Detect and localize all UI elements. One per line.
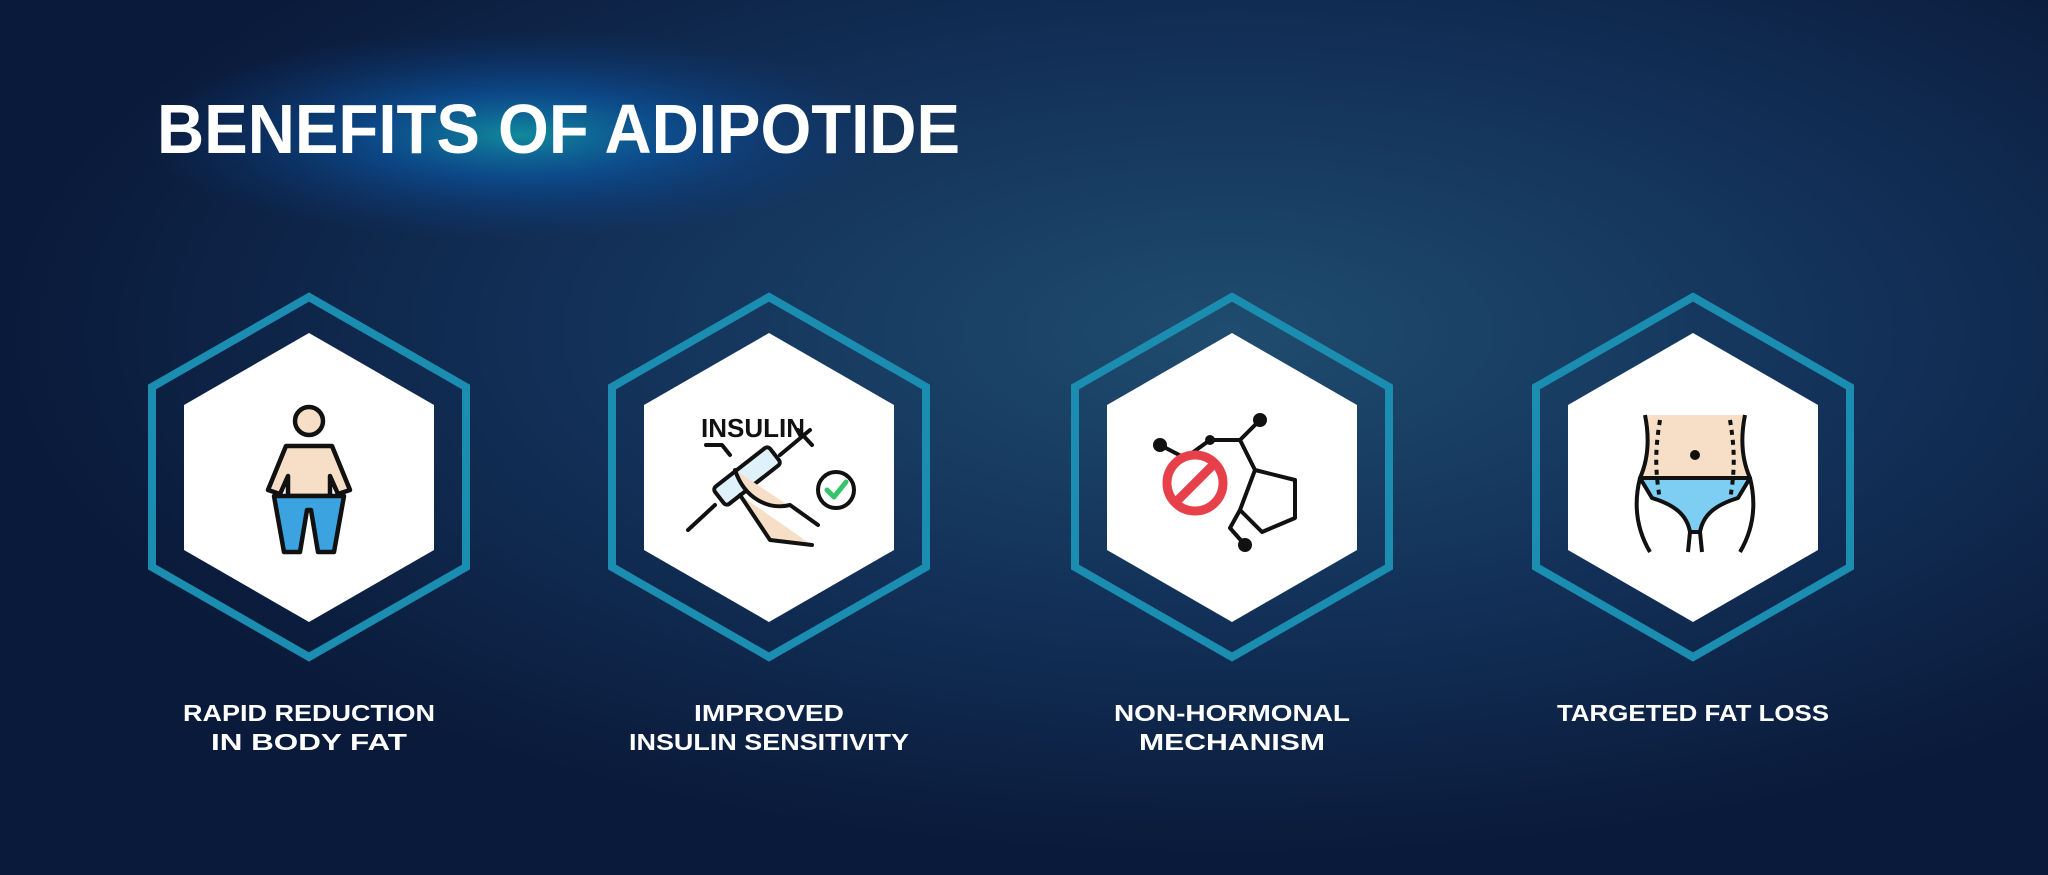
icon: person with loose pants bbox=[268, 407, 350, 552]
icon: insulin syringe: INSULIN bbox=[701, 413, 805, 443]
panel: non-hormonal mechanism bbox=[1075, 297, 1389, 755]
icon: waist with underwear bbox=[1637, 415, 1753, 552]
label: NON-HORMONAL bbox=[1114, 700, 1350, 726]
panel: rapid reduction in body fat: IN BODY FAT bbox=[211, 729, 407, 755]
panel: rapid reduction in body fat bbox=[152, 297, 466, 755]
label: TARGETED FAT LOSS bbox=[1557, 700, 1829, 726]
icon: insulin syringe bbox=[688, 413, 854, 545]
title glow bbox=[140, 30, 900, 240]
panel: improved insulin sensitivity: INSULIN SENSITIVITY bbox=[629, 729, 909, 755]
icon: molecule with prohibition sign bbox=[1155, 415, 1295, 550]
panel: improved insulin sensitivity bbox=[612, 297, 926, 755]
label: IMPROVED bbox=[694, 700, 844, 726]
label: RAPID REDUCTION bbox=[183, 700, 435, 726]
panel: non-hormonal mechanism: MECHANISM bbox=[1139, 729, 1325, 755]
panel: targeted fat loss bbox=[1536, 297, 1850, 726]
title: BENEFITS OF ADIPOTIDE bbox=[157, 90, 960, 168]
